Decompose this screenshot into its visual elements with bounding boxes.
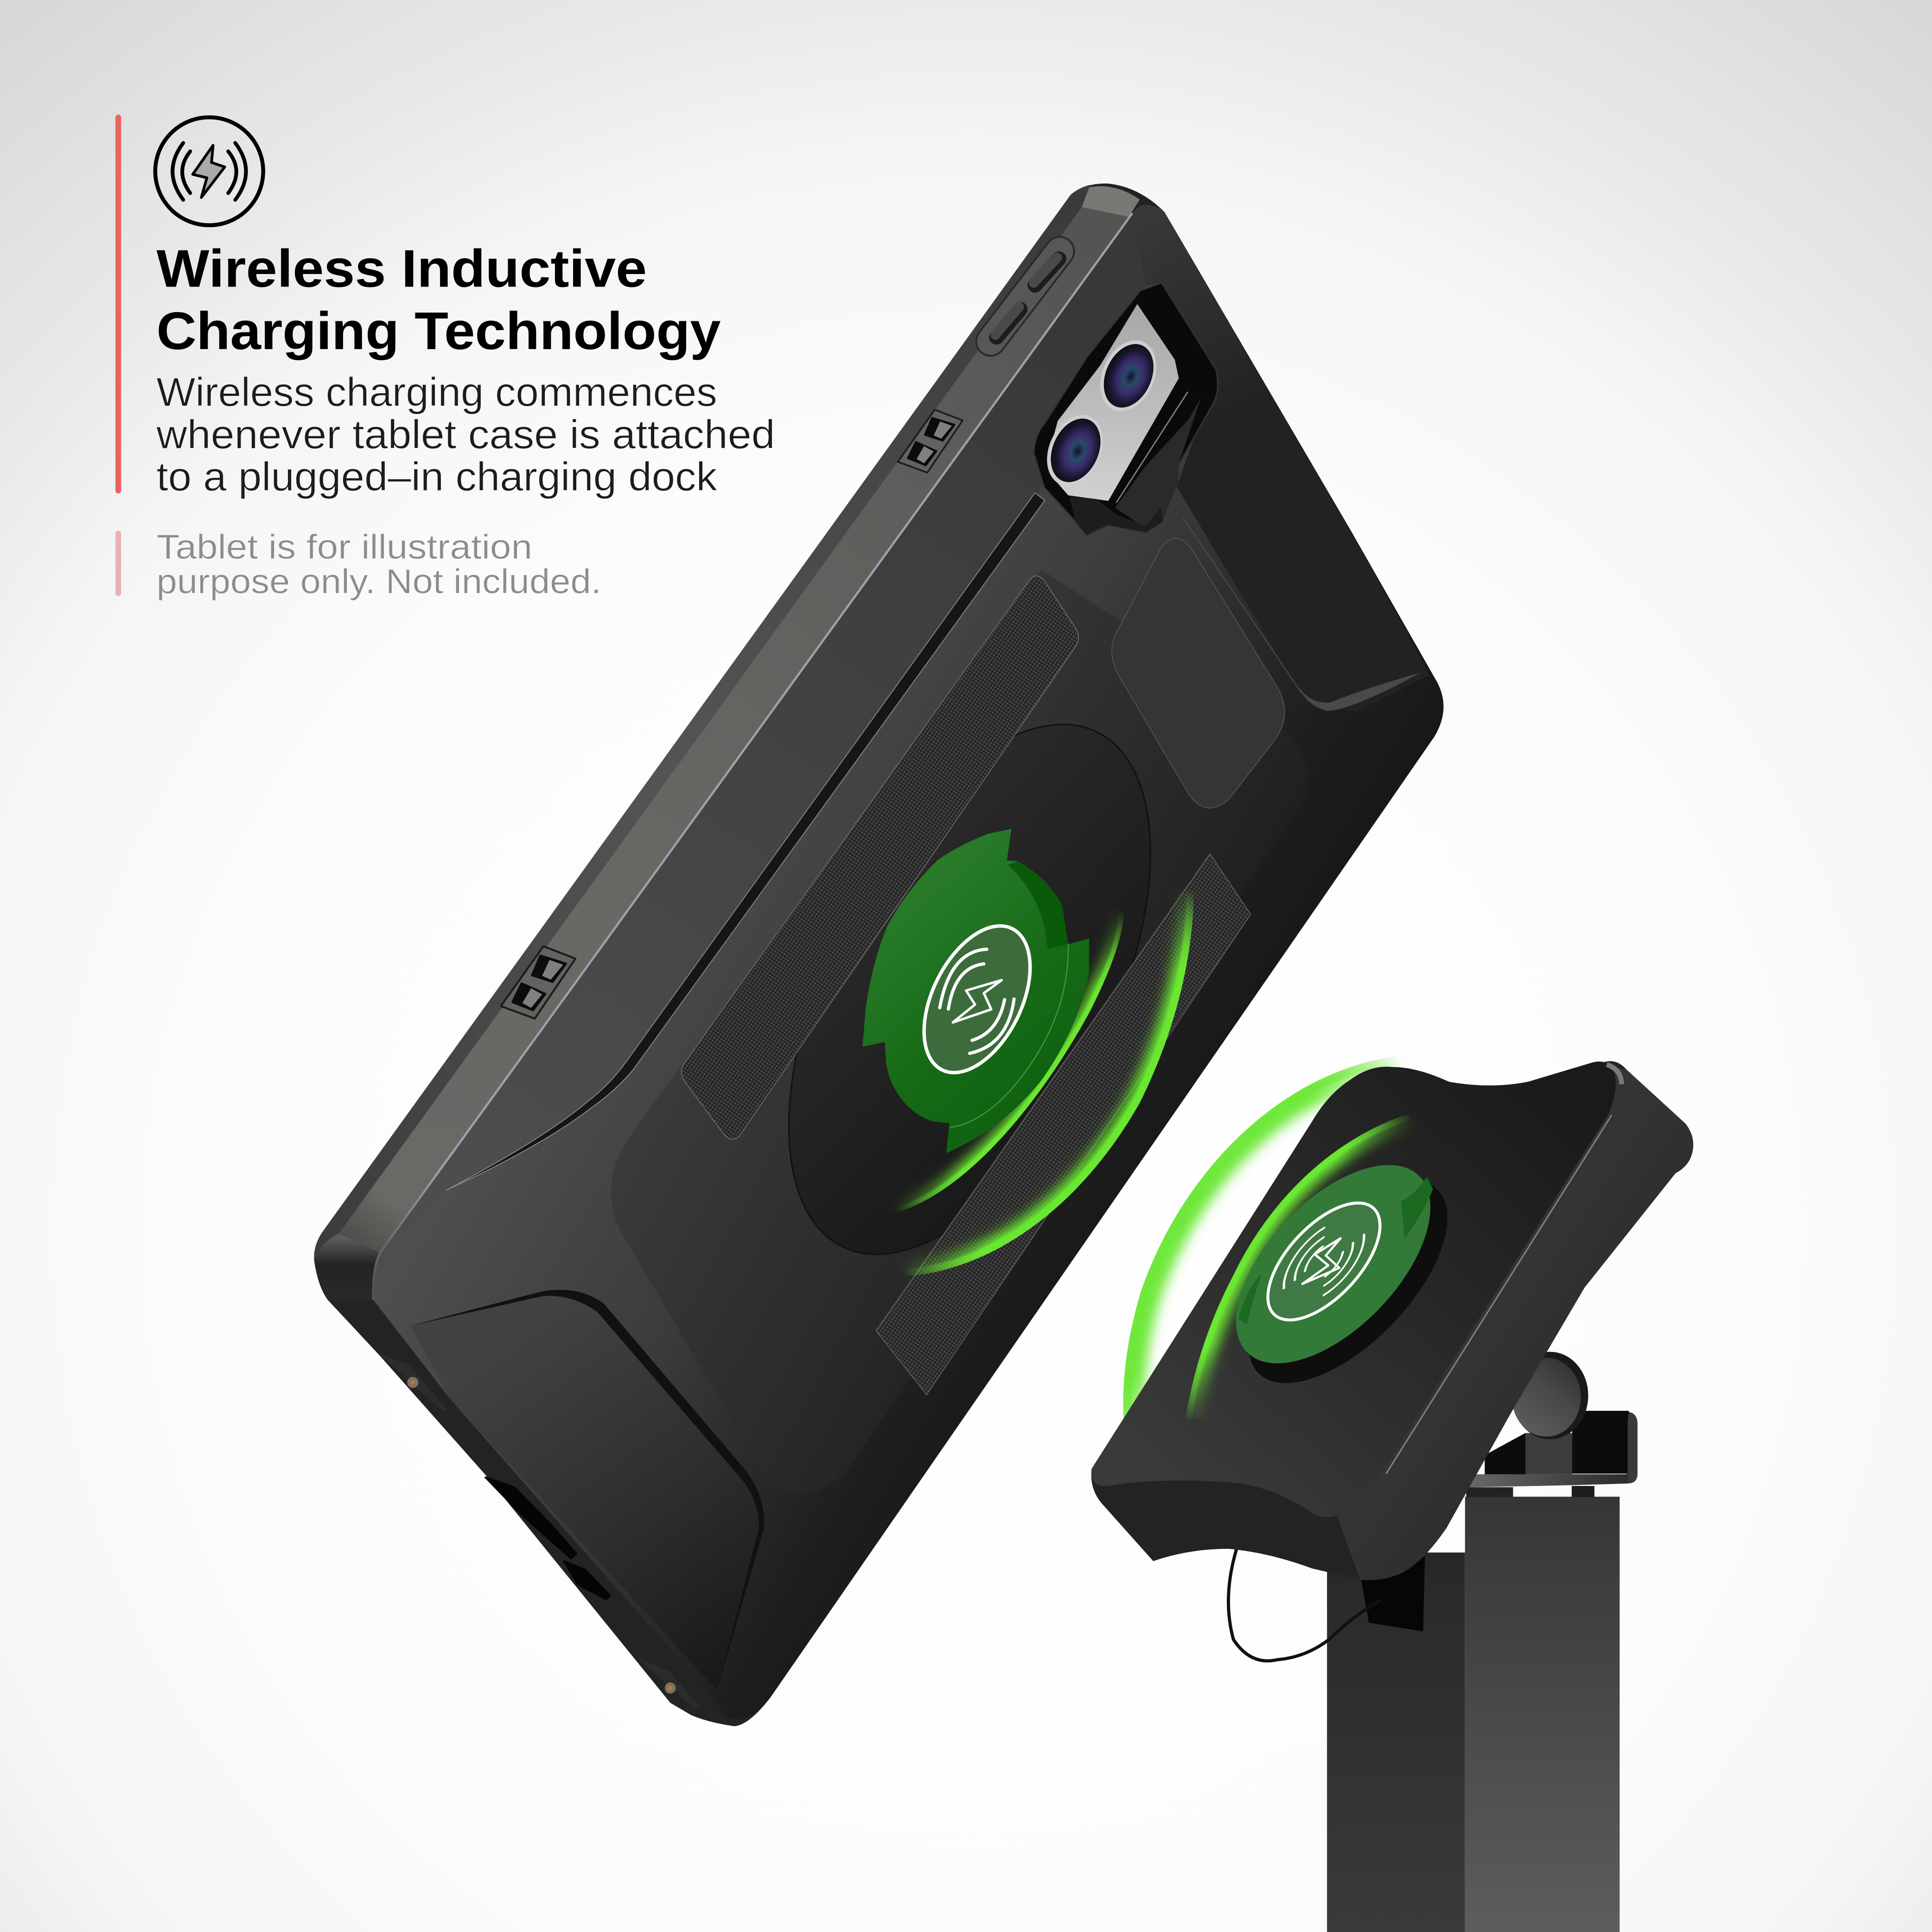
central panel — [611, 569, 1308, 1494]
button recess — [991, 251, 1059, 341]
disc inner shade — [1008, 861, 1068, 949]
ridge — [446, 493, 1045, 1190]
highlight line — [373, 213, 1132, 1300]
disc rim line — [950, 944, 1068, 1128]
charging recess — [714, 669, 1225, 1310]
button lower — [995, 307, 1020, 337]
charging stand — [1228, 1352, 1638, 1932]
stem — [1525, 1433, 1572, 1474]
left side panel — [380, 213, 1146, 1253]
cable — [1228, 1530, 1381, 1661]
side band — [339, 186, 1132, 1253]
side port lower — [501, 946, 575, 1019]
green disc — [1201, 1131, 1465, 1397]
bottom opening large — [485, 1477, 576, 1559]
bracket flange — [1626, 1412, 1638, 1484]
camera module — [1050, 304, 1179, 501]
icon: wireless charging — [155, 117, 263, 225]
washer — [1466, 1487, 1513, 1497]
dock ring — [1248, 1184, 1400, 1339]
side port upper — [898, 410, 963, 472]
spacer — [1572, 1486, 1594, 1497]
heading: Charging Technology — [157, 302, 721, 361]
bracket back — [1485, 1411, 1629, 1474]
dock plate — [1091, 1061, 1693, 1580]
connector right — [638, 1658, 701, 1709]
lens upper — [1090, 332, 1167, 420]
column side — [1327, 1552, 1465, 1932]
disc notches — [1238, 1177, 1433, 1325]
rounded panel — [1112, 538, 1284, 808]
corner highlight — [1607, 1065, 1621, 1084]
plate side — [1337, 1067, 1693, 1580]
description: whenever tablet case is attached — [156, 412, 775, 457]
tablet case — [314, 184, 1443, 1726]
dock bolt — [1302, 1238, 1340, 1284]
bottom panel — [410, 1292, 762, 1690]
module lip — [1116, 392, 1188, 503]
face — [373, 205, 1443, 1719]
green arc outer — [905, 892, 1194, 1276]
panel: text block — [115, 115, 775, 600]
fabric strap upper — [682, 576, 1078, 1139]
camera wedge — [1115, 397, 1201, 529]
plate front — [1091, 1062, 1616, 1517]
note bar — [115, 531, 121, 596]
bottom panel groove — [410, 1290, 764, 1690]
green charging disc — [862, 829, 1089, 1153]
description: to a plugged–in charging dock — [157, 454, 717, 499]
column front — [1465, 1497, 1620, 1932]
note: purpose only. Not included. — [157, 562, 601, 600]
magnet base — [1215, 1147, 1481, 1416]
case body — [314, 184, 1443, 1726]
lower corner — [314, 1233, 380, 1300]
camera cutout — [1034, 283, 1218, 536]
upper right panel — [1132, 205, 1429, 712]
connector left — [380, 1354, 447, 1412]
mount plate — [1466, 1474, 1628, 1487]
crease swoosh — [1299, 673, 1420, 711]
charging symbol — [940, 949, 1014, 1053]
centre ring — [902, 909, 1052, 1090]
fabric strap lower — [876, 854, 1250, 1395]
disc body — [862, 829, 1089, 1153]
bottom opening small — [564, 1561, 610, 1599]
green arc on plate — [1186, 1114, 1409, 1419]
upper right crease — [1183, 517, 1301, 693]
accent bar — [115, 115, 121, 493]
top corner metal — [1082, 186, 1140, 217]
plate edge highlight — [1386, 1115, 1612, 1473]
green arc inner — [897, 913, 1124, 1212]
dock symbol — [1273, 1210, 1375, 1314]
heading: Wireless Inductive — [157, 240, 647, 299]
pivot disc — [1512, 1352, 1588, 1439]
plate body — [1091, 1061, 1693, 1580]
lens lower — [1036, 406, 1114, 495]
description: Wireless charging commences — [157, 369, 717, 414]
cable slot — [1361, 1556, 1425, 1632]
camera lower lip — [1070, 497, 1163, 535]
green arc behind dock — [1123, 1056, 1397, 1424]
button upper — [1034, 257, 1059, 285]
note: Tablet is for illustration — [157, 528, 532, 566]
outer strip — [314, 185, 1090, 1269]
